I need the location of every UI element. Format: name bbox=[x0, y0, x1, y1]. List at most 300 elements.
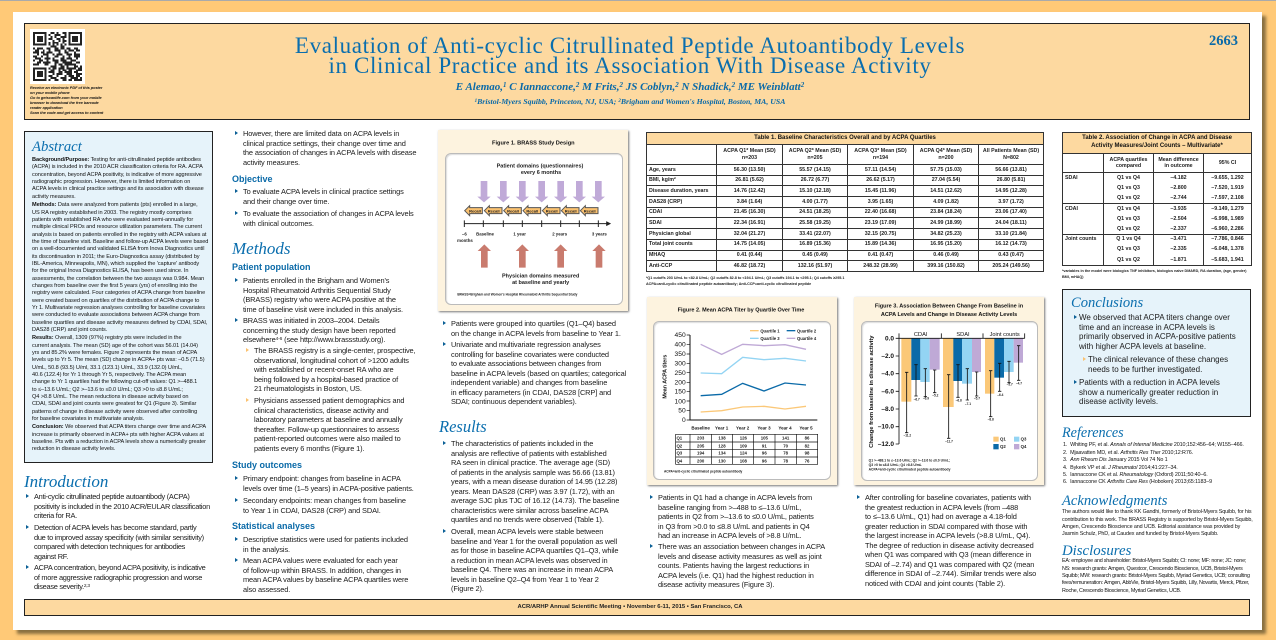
figure 2 title: Figure 2. Mean ACPA Titer by Quartile Over Time bbox=[678, 308, 804, 314]
data table: 205 bbox=[697, 443, 705, 448]
data table: 126 bbox=[740, 436, 748, 441]
data table: 78 bbox=[783, 458, 789, 463]
table 1: baseline characteristics: BMI, kg/m² bbox=[649, 177, 676, 183]
table 1: baseline characteristics: 21.45 (16.30) bbox=[734, 209, 765, 215]
data table: 109 bbox=[740, 443, 748, 448]
table 2: association of change in ACPA: –2.337 bbox=[1170, 226, 1187, 232]
table 1: baseline characteristics: 15.45 (11.96) bbox=[865, 188, 896, 194]
legend: Q3 bbox=[1021, 437, 1027, 442]
results bullet 3: Patients in Q1 had a change in ACPA levels from baseline ranging from >–488 to ≤–13.6 U/mL, patients in Q2 from >–13.6 to ≤0.0 U/mL, patients in Q3 from >0.0 to ≤8.8 U/mL and patients in Q4 had an increase in ACPA levels of >8.8 U/mL. bbox=[658, 493, 814, 540]
table 1: baseline characteristics: 14.51 (12.62) bbox=[930, 188, 962, 194]
table 2: association of change in ACPA: –5.683, 1.941 bbox=[1211, 257, 1244, 263]
data table: 124 bbox=[740, 451, 748, 456]
physician domains label: at baseline and yearly bbox=[512, 280, 570, 286]
legend: Q4 bbox=[1021, 444, 1027, 449]
table 1: baseline characteristics: 25.58 (19.25) bbox=[799, 220, 831, 226]
panel: figure 3 card bbox=[854, 297, 1044, 485]
table 1: baseline characteristics: 205.24 (149.56) bbox=[992, 263, 1030, 269]
y axis ticks: 0.0 bbox=[885, 335, 894, 342]
table 1: baseline characteristics: 22.34 (16.91) bbox=[734, 220, 765, 226]
table 2: association of change in ACPA: 95% CI bbox=[1219, 160, 1236, 166]
table 1: baseline characteristics: n=194 bbox=[873, 154, 888, 160]
error bar labels: –5.2 bbox=[932, 393, 939, 397]
table 1: baseline characteristics: 24.99 (18.99) bbox=[930, 220, 962, 226]
disclosures heading: Disclosures bbox=[1062, 543, 1131, 559]
y axis ticks bbox=[878, 335, 894, 448]
error bar labels: –6.8 bbox=[956, 399, 962, 403]
line: quartile 2 bbox=[701, 383, 806, 396]
recall arrows: Recall bbox=[469, 208, 481, 213]
table 2: association of change in ACPA: CDAI bbox=[1065, 206, 1078, 212]
table 2: association of change in ACPA: Q1 vs Q3 bbox=[1117, 216, 1140, 222]
patient population heading: Patient population bbox=[232, 262, 310, 272]
data table: 138 bbox=[718, 436, 726, 441]
table 1: baseline characteristics: ACPA Q1* Mean (SD) bbox=[723, 148, 776, 154]
table 1: baseline characteristics bbox=[646, 132, 1044, 272]
table 2: association of change in ACPA: –9.149, 1.279 bbox=[1211, 206, 1244, 212]
conclusions bullet 1: We observed that ACPA titers change over time and an increase in ACPA levels is primarily observed in ACPA-positive patients with higher ACPA levels at baseline. bbox=[1079, 313, 1236, 351]
table 1: baseline characteristics: 22.40 (16.68) bbox=[865, 209, 896, 215]
y axis ticks: –6.0 bbox=[881, 388, 894, 395]
table 2: association of change in ACPA: –7.520, 1.919 bbox=[1211, 185, 1244, 191]
results heading: Results bbox=[439, 417, 487, 436]
header banner bbox=[24, 23, 1250, 120]
error bar labels: –11.7 bbox=[945, 440, 953, 444]
data table: 141 bbox=[782, 436, 790, 441]
table 1: baseline characteristics: Anti-CCP bbox=[649, 263, 672, 269]
y axis ticks: –8.0 bbox=[881, 406, 894, 413]
recall arrows bbox=[465, 206, 598, 216]
y axis: 150 bbox=[675, 389, 686, 396]
error bar labels: –6.4 bbox=[997, 393, 1004, 397]
table 2: association of change in ACPA: –9.655, 1.292 bbox=[1211, 175, 1244, 181]
timeline bbox=[464, 220, 610, 227]
references heading: References bbox=[1062, 425, 1124, 441]
legend: Quartile 2 bbox=[797, 328, 817, 333]
data table: 96 bbox=[762, 451, 767, 456]
methods continued bullet 2: Univariate and multivariate regression analyses controlling for baseline covariates were conducted to evaluate associations between changes from baseline in ACPA levels (based on quartiles; categorical independent variable) and changes from baseline in efficacy parameters (in CDAI, DAS28 [CRP] and SDAI; continuous dependent variables). bbox=[451, 340, 626, 406]
table 1: baseline characteristics: 16.95 (15.20) bbox=[930, 241, 962, 247]
y axis ticks: –4.0 bbox=[881, 371, 894, 378]
recall arrows: Recall bbox=[488, 208, 500, 213]
references list: 1. Whiting PF, et al. Annals of Internal Medicine 2010;152:456–64; W155–466. 2. Mjaavatten MD, et al. Arthritis Res Ther 2010;12:R76. 3. Ann Rheum Dis January 2015 Vol 74 No 1 4. Bykerk VP et al. J Rheumatol 2014;41:227–34. 5. Iannaccone CK et al. Rheumatology (Oxford) 2011;50:40–6. 6. Iannaccone CK Arthritis Care Res (Hoboken) 2013;65:1183–9 bbox=[1063, 442, 1244, 485]
table 1 footnote: *Q1 cutoffs 203 U/mL to <82.8 U/mL; Q2 cutoffs 82.8 to <194.1 U/mL; Q3 cutoffs 194.1 to <295.1; Q4 cutoffs ≥295.1 ACPA=anti-cyclic citrullinated peptide autoantibody; Anti-CCP=anti-cyclic citrullinated peptide bbox=[646, 276, 844, 286]
introduction bullet 2: Detection of ACPA levels has become standard, partly due to improved assay specificity (with similar sensitivity) compared with detection techniques for antibodies against RF. bbox=[34, 523, 204, 561]
figure 3 footnote: Q3 >0 to ≤8.8 U/mL; Q4 >8.8 U/mL bbox=[869, 463, 922, 467]
data table: 91 bbox=[762, 443, 767, 448]
figure 1: BRASS study design bbox=[457, 140, 611, 296]
recall arrows: Recall bbox=[546, 208, 558, 213]
table 1: baseline characteristics: 33.41 (22.07) bbox=[799, 231, 831, 237]
table 1: baseline characteristics: 15.89 (14.36) bbox=[865, 241, 896, 247]
figure 3 title bbox=[875, 303, 1024, 318]
line: quartile 4 bbox=[701, 344, 806, 354]
objective bullet 2: To evaluate the association of changes in ACPA levels with clinical outcomes. bbox=[243, 209, 414, 228]
axes bbox=[896, 333, 1025, 444]
table 1: baseline characteristics: Table 1. Baseline Characteristics Overall and by ACPA Quartiles bbox=[754, 135, 936, 141]
table 2: association of change in ACPA: in outcome bbox=[1164, 163, 1193, 169]
figure 1 inner panel bbox=[445, 153, 623, 305]
table 1: baseline characteristics: 55.57 (14.15) bbox=[799, 167, 831, 173]
y axis title: Mean ACPA titers bbox=[663, 355, 669, 399]
table 1: baseline characteristics: 26.80 (5.81) bbox=[997, 177, 1025, 183]
x axis labels: Year 2 bbox=[736, 426, 750, 431]
figure 3 inner panel bbox=[861, 321, 1038, 481]
data table: 96 bbox=[762, 458, 767, 463]
data table: 134 bbox=[718, 451, 726, 456]
panel: abstract bbox=[24, 131, 213, 463]
patient domains label bbox=[497, 163, 584, 176]
table 1: baseline characteristics: Physician global bbox=[649, 231, 691, 237]
legend bbox=[993, 437, 1027, 449]
table 1: baseline characteristics: 24.51 (18.25) bbox=[799, 209, 831, 215]
table 1: baseline characteristics: 0.43 (0.47) bbox=[998, 252, 1024, 258]
physician domains label bbox=[502, 274, 579, 286]
data table: 203 bbox=[697, 436, 705, 441]
data table: 108 bbox=[740, 458, 748, 463]
timeline labels bbox=[457, 232, 607, 243]
table 2: association of change in ACPA: –6.998, 1.989 bbox=[1211, 216, 1244, 222]
table 1: baseline characteristics: All Patients Mean (SD) bbox=[983, 148, 1039, 154]
figure 2: line chart bbox=[662, 308, 818, 474]
error bar labels bbox=[903, 381, 1022, 444]
table 2: association of change in ACPA: Q1 vs Q4 bbox=[1117, 206, 1140, 212]
y axis: 100 bbox=[675, 398, 686, 405]
table 2: association of change in ACPA: Q1 vs Q4 bbox=[1117, 175, 1140, 181]
data table: 105 bbox=[761, 436, 769, 441]
data table: 98 bbox=[805, 451, 810, 456]
table 1: baseline characteristics: 0.41 (0.44) bbox=[737, 252, 762, 258]
data table: Q4 bbox=[676, 458, 683, 463]
y axis: 200 bbox=[675, 379, 686, 386]
table 1: baseline characteristics: 23.84 (18.24) bbox=[930, 209, 962, 215]
purple arrows bbox=[477, 181, 605, 202]
acknowledgments text: The authors would like to thank KK Gandhi, formerly of Bristol-Myers Squibb, for his contribution to this work. The BRASS Registry is supported by Bristol-Myers Squibb, Amgen, Crescendo Bioscience and UCB. Editorial assistance was provided by Jasmin Schulz, PhD, at Caudex and funded by Bristol-Myers Squibb. bbox=[1062, 509, 1253, 537]
study outcomes bullet 2: Secondary endpoints: mean changes from baseline to Year 1 in CDAI, DAS28 (CRP) and SDAI. bbox=[243, 496, 406, 515]
error bar labels: –5.7 bbox=[974, 396, 980, 400]
y axis: 450 bbox=[675, 332, 686, 339]
table 2: association of change in ACPA: Mean difference bbox=[1158, 156, 1199, 162]
table 2: association of change in ACPA: –3.471 bbox=[1170, 236, 1187, 242]
table 1: baseline characteristics: 24.04 (18.11) bbox=[995, 220, 1027, 226]
table 1: baseline characteristics: 14.76 (12.42) bbox=[734, 188, 765, 194]
bars: Q3 bbox=[920, 338, 1014, 384]
figure 2 inner panel bbox=[653, 321, 831, 480]
table 2: association of change in ACPA: Q 1 vs Q4 bbox=[1116, 236, 1141, 242]
introduction heading: Introduction bbox=[24, 472, 108, 491]
affiliations: 1Bristol-Myers Squibb, Princeton, NJ, USA; 2Brigham and Women's Hospital, Boston, MA, USA bbox=[475, 97, 785, 106]
table 1: baseline characteristics: MHAQ bbox=[649, 252, 665, 258]
data table: 200 bbox=[697, 458, 705, 463]
data table: 78 bbox=[783, 451, 789, 456]
recall arrows: Recall bbox=[526, 208, 538, 213]
abstract methods: Methods: Data were analyzed from patients (pts) enrolled in a large, US RA registry established in 2003. The registry mostly comprises patients with established RA who were evaluated semi-annually for multiple clinical PROs and resource utilization parameters. The current analysis is based on patients enrolled in the registry with ACPA values at the time of baseline visit. Baseline and follow-up ACPA levels were based on a well-documented and validated ELISA from Inova Diagnostics until its discontinuation in 2011; the Euro-Diagnostica assay (distributed by IBL-America, Minneapolis, MN), which supplied the 'capture' antibody for the original Inova Diagnostics ELISA, has been used since. In assessments, the correlation between the two assays was 0.984. Mean changes from baseline over the first 5 years (yrs) of enrolling into the registry were calculated. Four categories of ACPA change from baseline were created based on quartiles of the distribution of ACPA change to Yr 1. Multivariate regression analyses controlling for baseline covariates were conducted to evaluate associations between ACPA change from baseline quartiles and disease activity measures defined by CDAI, SDAI, DAS28 (CRP) and joint counts. bbox=[32, 202, 208, 333]
QR instructions: Receive an electronic PDF of this poster on your mobile phone Go to getscanlife.com from your mobile browser to download the free barcode reader application Scan the code and get access to content bbox=[30, 84, 103, 115]
data table: Q1 bbox=[676, 436, 683, 441]
table 1: baseline characteristics: n=205 bbox=[807, 154, 823, 160]
results bullet 5: After controlling for baseline covariates, patients with the greatest reduction in ACPA levels (from –488 to ≤–13.6 U/mL, Q1) had on average a 4.18-fold greater reduction in SDAI compared with those with the largest increase in ACPA levels (>8.8 U/mL, Q4). The degree of reduction in disease activity decreased when Q1 was compared with Q3 (mean difference in SDAI of –2.74) and Q1 was compared with Q2 (mean difference in SDAI of –2.744). Similar trends were also noticed with CDAI and joint counts (Table 2). bbox=[865, 493, 1036, 588]
figure 2 footnote: ACPA=anti-cyclic citrullinated peptide autoantibody bbox=[664, 470, 743, 474]
timeline labels: 1 year bbox=[513, 232, 526, 237]
data table: Q2 bbox=[676, 443, 683, 448]
table 1: baseline characteristics: 33.10 (21.84) bbox=[995, 231, 1027, 237]
legend: Q2 bbox=[1000, 444, 1006, 449]
statistical analyses bullet 2: Mean ACPA values were evaluated for each year of follow-up within BRASS. In addition, changes in mean ACPA values by baseline ACPA quartiles were also assessed. bbox=[243, 556, 408, 594]
red arrows bbox=[478, 244, 606, 268]
timeline labels: months bbox=[457, 238, 473, 243]
table 2: association of change in ACPA: Joint counts bbox=[1065, 236, 1096, 242]
table 1: baseline characteristics: 56.30 (13.50) bbox=[734, 167, 765, 173]
y axis ticks: –12.0 bbox=[878, 441, 894, 448]
table 1: baseline characteristics: Age, years bbox=[649, 167, 676, 173]
figure 3 footnote bbox=[869, 458, 951, 471]
error bar labels: –6.9 bbox=[923, 397, 929, 401]
study outcomes heading: Study outcomes bbox=[232, 460, 302, 470]
abstract heading: Abstract bbox=[32, 139, 82, 155]
table 1: baseline characteristics: 23.06 (17.40) bbox=[995, 209, 1027, 215]
table 1: baseline characteristics: Disease duration, years bbox=[649, 188, 708, 194]
title: Evaluation of Anti-cyclic Citrullinated Peptide Autoantibody Levels in Clinical Practice and its Association With Disease Activity bbox=[295, 33, 965, 78]
x axis labels: Year 5 bbox=[799, 426, 813, 431]
table 2: association of change in ACPA: –7.597, 2.108 bbox=[1211, 195, 1244, 201]
table 2: association of change in ACPA: Q1 vs Q2 bbox=[1117, 257, 1140, 263]
figure 1 title: Figure 1. BRASS Study Design bbox=[492, 141, 575, 147]
legend: Quartile 4 bbox=[797, 336, 817, 341]
table 1: baseline characteristics: 3.95 (1.65) bbox=[868, 199, 893, 205]
figure 3: bar chart bbox=[868, 303, 1027, 472]
line: quartile 1 bbox=[701, 406, 806, 412]
table 2: association of change in ACPA: –6.960, 2.286 bbox=[1211, 226, 1244, 232]
conclusions bullet 2: Patients with a reduction in ACPA levels show a numerically greater reduction in disease activity levels. bbox=[1079, 378, 1220, 406]
data table: 70 bbox=[783, 443, 789, 448]
sub-bullet: physicians assessed: Physicians assessed patient demographics and clinical characteristics, disease activity and laboratory parameters at baseline and annually thereafter. Follow-up questionnaires to assess patient-reported outcomes were also mailed to patients every 6 months (Figure 1). bbox=[254, 396, 404, 453]
table 1: baseline characteristics: 23.19 (17.09) bbox=[865, 220, 896, 226]
data table: 86 bbox=[805, 436, 810, 441]
introduction bullet 1: Anti-cyclic citrullinated peptide autoantibody (ACPA) positivity is included in the 2010 ACR/EULAR classification criteria for RA. bbox=[34, 492, 210, 520]
table 1: baseline characteristics: 0.46 (0.49) bbox=[933, 252, 959, 258]
icon: QR code bbox=[30, 29, 85, 84]
methods heading: Methods bbox=[232, 239, 291, 258]
table 1: baseline characteristics: 57.11 (14.54) bbox=[865, 167, 896, 173]
footer bar bbox=[24, 599, 1250, 616]
abstract background: Background/Purpose: Testing for anti-citrullinated peptide antibodies (ACPA) is included in the 2010 ACR classification criteria for RA. ACPA concentration, beyond ACPA positivity, is indicative of more aggressive radiographic progression. However, there is limited information on ACPA levels in clinical practice settings and its association with disease activity measures. bbox=[32, 157, 204, 200]
panel: figure 2 card bbox=[647, 297, 837, 485]
patient domains label: every 6 months bbox=[521, 170, 561, 176]
error bar labels: –6.7 bbox=[914, 398, 920, 402]
legend: Quartile 3 bbox=[760, 336, 780, 341]
table 1: baseline characteristics: n=203 bbox=[742, 154, 757, 160]
objective bullet 1: To evaluate ACPA levels in clinical practice settings and their change over time. bbox=[243, 187, 404, 206]
conclusions heading: Conclusions bbox=[1071, 295, 1143, 311]
y axis bbox=[675, 332, 817, 424]
x axis labels: Baseline bbox=[691, 426, 710, 431]
error bars bbox=[905, 346, 1020, 438]
table 1: baseline characteristics: Total joint counts bbox=[649, 241, 693, 247]
table 2: association of change in ACPA: compared bbox=[1116, 163, 1141, 169]
table 2: association of change in ACPA: –6.048, 1.378 bbox=[1211, 246, 1244, 252]
table 1: baseline characteristics: 56.66 (13.81) bbox=[995, 167, 1027, 173]
x axis labels: Year 1 bbox=[715, 426, 729, 431]
table 1: baseline characteristics: ACPA Q4* Mean (SD) bbox=[920, 148, 972, 154]
top grey edge bbox=[0, 0, 1276, 1]
table 1: baseline characteristics: n=200 bbox=[938, 154, 954, 160]
table 2: association of change in ACPA: Q1 vs Q3 bbox=[1117, 246, 1140, 252]
x axis labels bbox=[691, 426, 813, 431]
data table: 128 bbox=[718, 443, 726, 448]
recall arrows: Recall bbox=[507, 208, 519, 213]
data table: 194 bbox=[697, 451, 705, 456]
timeline labels: –6 bbox=[462, 232, 467, 237]
y axis: 350 bbox=[675, 351, 686, 358]
y axis ticks: –2.0 bbox=[881, 353, 894, 360]
group headers bbox=[914, 332, 1020, 338]
data table bbox=[676, 434, 818, 464]
figure 1 footnote: BRASS=Brigham and Women's Hospital Rheumatoid Arthritis Sequential Study bbox=[457, 292, 578, 296]
table 2: association of change in ACPA: SDAI bbox=[1065, 175, 1078, 181]
figure 3 title: Figure 3. Association Between Change From Baseline in bbox=[875, 303, 1024, 309]
results bullet 2: Overall, mean ACPA levels were stable between baseline and Year 1 for the overall population as well as for those in baseline ACPA quartiles Q1–Q3, while a reduction in mean ACPA levels was observed in baseline Q4. There was an increase in mean ACPA levels in baseline Q2–Q4 from Year 1 to Year 2 (Figure 2). bbox=[451, 527, 618, 593]
panel: figure 1 card bbox=[438, 130, 628, 311]
authors: E Alemao,1 C Iannaccone,2 M Frits,2 JS Coblyn,2 N Shadick,2 ME Weinblatt2 bbox=[456, 81, 804, 93]
table 2: association of change in ACPA: –2.744 bbox=[1170, 195, 1187, 201]
group headers: CDAI bbox=[914, 332, 928, 338]
abstract conclusion: Conclusion: We observed that ACPA titers change over time and ACPA increase is primarily observed in ACPA+ pts with higher ACPA values at baseline. Pts with a reduction in ACPA levels show a numerically greater reduction in disease activity levels. bbox=[32, 424, 206, 452]
table 1: baseline characteristics: 3.97 (1.72) bbox=[998, 199, 1024, 205]
line: quartile 3 bbox=[701, 357, 806, 374]
y axis: 0 bbox=[682, 417, 686, 424]
figure 3 title: ACPA Levels and Change in Disease Activity Levels bbox=[881, 312, 1017, 318]
table 2 footnote: *variables in the model were biologics TNF inhibitors, biologics naive DMARD, RA duration, (age, gender) BMI, mHAQ) bbox=[1062, 269, 1246, 279]
figure 3 footnote: ACPA=anti-cyclic citrullinated peptide autoantibody bbox=[869, 467, 951, 471]
error bar labels: –7.1 bbox=[965, 402, 971, 406]
statistical analyses heading: Statistical analyses bbox=[232, 521, 315, 531]
patient population bullet 2: BRASS was initiated in 2003–2004. Details concerning the study design have been reported elsewhere4-6 (see http://www.brassstudy.org). bbox=[243, 316, 396, 344]
recall arrows: Recall bbox=[565, 208, 577, 213]
table 2: association of change in ACPA bbox=[1062, 132, 1252, 266]
table 2: association of change in ACPA: –2.800 bbox=[1170, 185, 1187, 191]
timeline labels: 2 years bbox=[552, 232, 568, 237]
disclosures text: EA: employee and shareholder: Bristol-Myers Squibb; CI: none; MF: none; JC: none; NS: research grants: Amgen, Questcor, Crescendo Bioscience, UCB, Bristol-Myers Squibb; MW: research grants: Bristol-Myers Squibb, Myriad Genetics, UCB; consulting fees/remuneration: Amgen, AbbVie, Bristol-Myers Squibb, Lilly, Novartis, Merck, Pfizer, Roche, Crescendo Bioscience, Myriad Genetics, UCB. bbox=[1062, 558, 1250, 594]
legend bbox=[750, 328, 817, 341]
introduction bullet 3: ACPA concentration, beyond ACPA positivity, is indicative of more aggressive radiographic progression and worse disease severity.2,3 bbox=[34, 563, 206, 591]
x axis labels: Year 4 bbox=[778, 426, 792, 431]
timeline labels: 3 years bbox=[592, 232, 607, 237]
figure 3 footnote: Q1 >–488.1 to ≤–13.6 U/mL; Q2 >–13.6 to ≤0.0 U/mL; bbox=[869, 458, 950, 462]
y axis title: Change from baseline in disease activity bbox=[869, 335, 875, 448]
table 2: association of change in ACPA: –2.335 bbox=[1170, 246, 1187, 252]
table 2: association of change in ACPA: –7.786, 0.846 bbox=[1211, 236, 1244, 242]
table 1: baseline characteristics: 27.04 (5.54) bbox=[932, 177, 960, 183]
table 1: baseline characteristics: 4.00 (1.77) bbox=[802, 199, 828, 205]
physician domains label: Physician domains measured bbox=[502, 274, 579, 280]
sub-bullet: BRASS registry: The BRASS registry is a single-center, prospective, observational, longitudinal cohort of >1200 adults with established or recent-onset RA who are being followed by a hospital-based practice of 21 rheumatologists in Boston, US. bbox=[254, 346, 415, 393]
table 2: association of change in ACPA: –2.504 bbox=[1170, 216, 1187, 222]
y axis ticks: –10.0 bbox=[878, 424, 894, 431]
objective heading: Objective bbox=[232, 174, 273, 184]
bars: Q1 bbox=[901, 338, 994, 407]
abstract results: Results: Overall, 1309 (97%) registry pts were included in the current analysis. The mean (SD) age of the cohort was 56.01 (14.04) yrs and 85.2% were females. Figure 2 represents the mean of ACPA levels up to Yr 5. The mean (SD) change in ACPA+ pts was: –0.5 (71.5) U/mL, 50.8 (93.5) U/ml, 33.1 (123.1) U/mL, 33.9 (132.0) U/mL, 40.6 (122.4) for Yr 1 through Yr 5, respectively. The ACPA mean change to Yr 1 quartiles had the following cut-off values: Q1 >–488.1 to ≤–13.6 U/mL; Q2 >–13.6 to ≤0.0 U/mL; Q3 >0 to ≤8.8 U/mL; Q4 >8.8 U/mL. The mean reductions in disease activity based on CDAI, SDAI and joint counts were greatest for Q1 (Figure 3). Similar patterns of change in disease activity were observed after controlling for baseline covariates in multivariate analysis. bbox=[32, 335, 205, 422]
introduction continued bullet: However, there are limited data on ACPA levels in clinical practice settings, their change over time and the association of changes in ACPA levels with disease activity measures. bbox=[243, 129, 416, 167]
table 1: baseline characteristics: 32.04 (21.27) bbox=[734, 231, 765, 237]
data table: 130 bbox=[718, 458, 726, 463]
table 1: baseline characteristics: DAS28 (CRP) bbox=[649, 199, 682, 205]
table 2: association of change in ACPA: Q1 vs Q2 bbox=[1117, 226, 1140, 232]
table 2: association of change in ACPA: –3.935 bbox=[1170, 206, 1187, 212]
data table: 76 bbox=[805, 458, 810, 463]
table 2: association of change in ACPA: Q1 vs Q2 bbox=[1117, 195, 1140, 201]
table 1: baseline characteristics: 4.09 (1.82) bbox=[933, 199, 959, 205]
recall arrows: Recall bbox=[584, 208, 596, 213]
results bullet 4: There was an association between changes in ACPA levels and disease activity measures as well as joint counts. Patients having the largest reductions in ACPA levels (i.e. Q1) had the highest reduction in disease activity measures (Figure 3). bbox=[658, 542, 825, 589]
error bar labels: –11.2 bbox=[903, 434, 911, 438]
table 1: baseline characteristics: 248.32 (28.99) bbox=[863, 263, 898, 269]
bars: Q4 bbox=[930, 338, 1023, 372]
legend: Q1 bbox=[1000, 437, 1006, 442]
table 1: baseline characteristics: ACPA Q3* Mean (SD) bbox=[854, 148, 907, 154]
table 2: association of change in ACPA: –4.182 bbox=[1170, 175, 1187, 181]
table 2: association of change in ACPA: Q1 vs Q3 bbox=[1117, 185, 1140, 191]
y axis: 400 bbox=[675, 342, 686, 349]
table 2: association of change in ACPA: Table 2. Association of Change in ACPA and Disease bbox=[1082, 135, 1232, 141]
table 1: baseline characteristics: 14.95 (12.28) bbox=[995, 188, 1027, 194]
table 1: baseline characteristics: 57.75 (15.03) bbox=[930, 167, 962, 173]
table 1: baseline characteristics: 0.45 (0.49) bbox=[802, 252, 828, 258]
footer bar: ACR/ARHP Annual Scientific Meeting • November 6-11, 2015 • San Francisco, CA bbox=[517, 604, 743, 610]
table 1: baseline characteristics: 32.15 (20.75) bbox=[865, 231, 896, 237]
table 1: baseline characteristics: 26.72 (6.77) bbox=[801, 177, 829, 183]
table 1: baseline characteristics: 26.62 (5.17) bbox=[866, 177, 895, 183]
table 1: baseline characteristics: 16.89 (15.36) bbox=[799, 241, 831, 247]
table 1: baseline characteristics: 132.16 (51.97) bbox=[798, 263, 832, 269]
results bullet 1: The characteristics of patients included in the analysis are reflective of patients with established RA seen in clinical practice. The average age (SD) of patients in the analysis sample was 56.66 (13.81) years, with a mean disease duration of 14.95 (12.28) years. Mean DAS28 (CRP) was 3.97 (1.72), with an average SJC plus TJC of 16.12 (14.73). The baseline characteristics were similar across baseline ACPA quartiles and no trends were observed (Table 1). bbox=[451, 439, 619, 524]
table 1: baseline characteristics: 14.75 (14.05) bbox=[734, 241, 765, 247]
legend: Quartile 1 bbox=[760, 328, 780, 333]
methods continued bullet 1: Patients were grouped into quartiles (Q1–Q4) based on the change in ACPA levels from baseline to Year 1. bbox=[451, 319, 621, 338]
error bar labels: –8.8 bbox=[988, 418, 994, 422]
table 2: association of change in ACPA: Activity Measures/Joint Counts – Multivariate* bbox=[1091, 143, 1223, 149]
x axis labels: Year 3 bbox=[757, 426, 771, 431]
table 2: association of change in ACPA: –1.871 bbox=[1170, 257, 1187, 263]
patient population bullet 1: Patients enrolled in the Brigham and Women's Hospital Rheumatoid Arthritis Sequential Study (BRASS) registry who were ACPA positive at the time of baseline visit were included in this analysis. bbox=[243, 276, 403, 314]
data table: Q3 bbox=[676, 451, 683, 456]
y axis: 300 bbox=[675, 360, 686, 367]
table 1: baseline characteristics: 0.41 (0.47) bbox=[868, 252, 893, 258]
table 1: baseline characteristics: 26.81 (5.62) bbox=[735, 177, 764, 183]
timeline labels: Baseline bbox=[476, 232, 494, 237]
table 2: association of change in ACPA: ACPA quartiles bbox=[1110, 156, 1147, 162]
study outcomes bullet 1: Primary endpoint: changes from baseline in ACPA levels over time (1–5 years) in ACPA-positive patients. bbox=[243, 474, 414, 493]
acknowledgments heading: Acknowledgments bbox=[1062, 493, 1167, 509]
data table: 82 bbox=[805, 443, 810, 448]
table 1: baseline characteristics: 399.16 (150.82) bbox=[927, 263, 965, 269]
y axis: 50 bbox=[678, 408, 686, 415]
table 1: baseline characteristics: N=802 bbox=[1003, 154, 1019, 160]
group headers: Joint counts bbox=[990, 332, 1020, 338]
panel: conclusions bbox=[1062, 289, 1251, 417]
table 1: baseline characteristics: 34.82 (25.23) bbox=[930, 231, 962, 237]
table 1: baseline characteristics: 3.84 (1.64) bbox=[737, 199, 762, 205]
error bar labels: –4.7 bbox=[1016, 381, 1022, 385]
table 1: baseline characteristics: CDAI bbox=[649, 209, 662, 215]
table 1: baseline characteristics: 46.82 (18.72) bbox=[734, 263, 765, 269]
table 1: baseline characteristics: SDAI bbox=[649, 220, 662, 226]
patient domains label: Patient domains (questionnaires) bbox=[497, 163, 584, 169]
poster number: 2663 bbox=[1209, 33, 1238, 49]
table 1: baseline characteristics: 15.10 (12.18) bbox=[799, 188, 831, 194]
bars: Q2 bbox=[911, 338, 1004, 381]
error bar labels: –5.7 bbox=[1007, 383, 1013, 387]
table 1: baseline characteristics: ACPA Q2* Mean (SD) bbox=[789, 148, 841, 154]
